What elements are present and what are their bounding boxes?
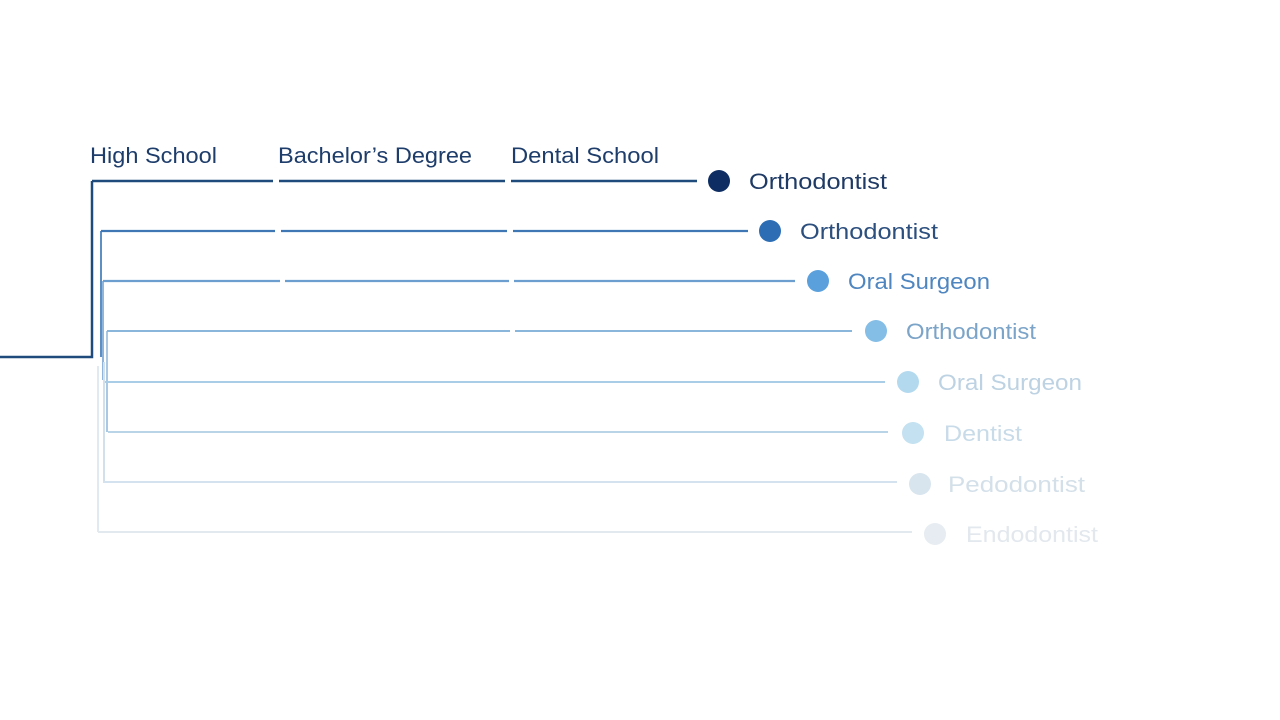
branch 6: Dentist: Dentist — [944, 421, 1022, 446]
branch 2: Orthodontist — [101, 219, 938, 244]
branch 2: Orthodontist: Orthodontist — [800, 219, 938, 244]
branch 1: Orthodontist: Orthodontist — [749, 169, 887, 194]
stage headers — [90, 143, 659, 168]
header: bachelor's degree: Bachelor’s Degree — [278, 143, 472, 168]
branch 5: Oral Surgeon — [105, 370, 1082, 395]
trunk line — [0, 181, 107, 532]
branch 1: Orthodontist — [92, 169, 887, 194]
branch 6: Dentist — [108, 421, 1022, 446]
header: dental school: Dental School — [511, 143, 659, 168]
branch 7: Pedodontist — [103, 472, 1085, 497]
header: high school: High School — [90, 143, 217, 168]
branch 4: Orthodontist — [107, 319, 1036, 344]
branch 7: Pedodontist: Pedodontist — [948, 472, 1085, 497]
branch 4: Orthodontist: Orthodontist — [906, 319, 1036, 344]
branch 3: Oral Surgeon: Oral Surgeon — [848, 269, 990, 294]
branch 5: Oral Surgeon: Oral Surgeon — [938, 370, 1082, 395]
branch 8: Endodontist — [98, 522, 1098, 547]
branch 8: Endodontist: Endodontist — [966, 522, 1098, 547]
branch 3: Oral Surgeon — [103, 269, 990, 294]
